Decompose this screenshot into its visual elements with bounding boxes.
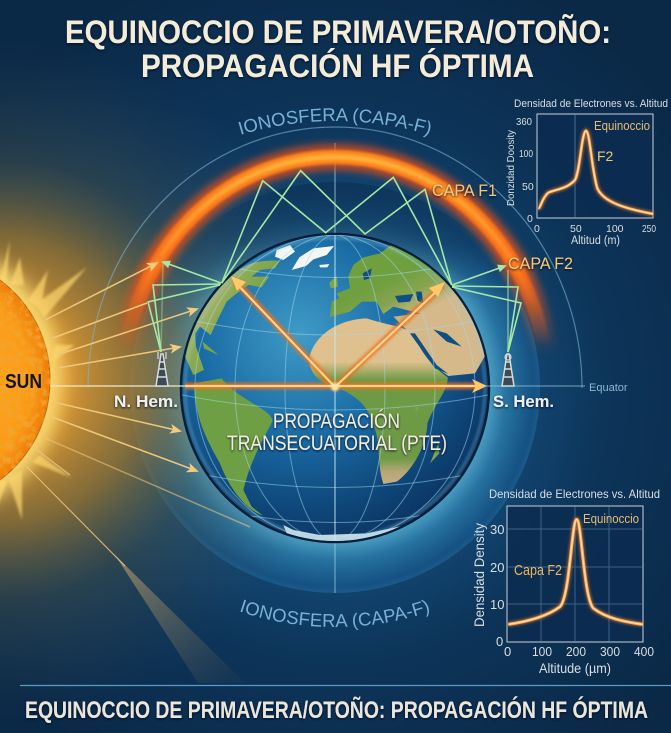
label: transequatorial propagation: PROPAGACIÓN	[273, 410, 400, 433]
continent: north america	[185, 261, 280, 375]
limb shading	[185, 238, 485, 538]
label: ionosfera top: IONOSFERA (CAPA-F)	[238, 108, 430, 138]
chart: top density: 0	[534, 223, 540, 235]
chart: bottom density	[471, 487, 660, 676]
sun rays glow	[0, 240, 87, 520]
sea: gulfs	[363, 268, 462, 374]
label: N. Hem.: N. Hem.	[114, 392, 178, 411]
equator line	[50, 235, 585, 540]
orange propagation arrows	[185, 276, 487, 393]
chart: top density: 250	[642, 223, 656, 235]
chart: bottom density: 0	[496, 634, 503, 649]
chart: top density: Equinoccio	[594, 119, 650, 133]
chart: bottom density: 30	[490, 522, 504, 537]
chart: bottom density: 200	[566, 644, 586, 659]
label: transequatorial propagation: TRANSECUATORIAL (PTE)	[227, 432, 447, 455]
ionospheric F layer arc	[123, 157, 547, 388]
title	[65, 14, 611, 84]
title: EQUINOCCIO DE PRIMAVERA/OTOÑO:	[65, 14, 611, 50]
label: S. Hem.: S. Hem.	[493, 392, 554, 411]
chart: top density: Altitud (m)	[571, 235, 620, 247]
continent: eurasia	[330, 243, 488, 376]
green skywave paths	[148, 171, 521, 352]
chart: bottom density: 0	[504, 644, 511, 659]
chart: bottom density: Equinoccio	[583, 512, 639, 526]
chart: bottom density: Densidad Density	[471, 523, 487, 627]
chart: top density	[505, 98, 668, 247]
continent: antarctica	[283, 525, 401, 541]
sun: SUN	[5, 371, 42, 393]
continent: africa	[309, 318, 448, 484]
chart: bottom density: 20	[490, 560, 504, 575]
continent: greenland	[275, 245, 334, 270]
icon: north tower	[156, 352, 168, 386]
chart: top density: F2	[597, 148, 614, 164]
label: CAPA F2: CAPA F2	[508, 254, 573, 273]
chart: bottom density: 100	[532, 644, 552, 659]
chart: top density: 50	[522, 181, 534, 193]
equator label: Equator	[589, 382, 628, 394]
label: transequatorial propagation	[227, 410, 447, 455]
title: PROPAGACIÓN HF ÓPTIMA	[141, 48, 534, 84]
chart: bottom density: 400	[634, 644, 654, 659]
ionosphere rings	[88, 127, 582, 593]
icon: south tower	[502, 354, 514, 386]
chart: bottom density: Densidad de Electrones vs. Altitud	[489, 487, 660, 501]
solar ray arrows	[37, 263, 250, 527]
sun	[0, 255, 50, 505]
label: ionosfera bottom: IONOSFERA (CAPA-F)	[240, 600, 429, 630]
continent: south america	[194, 378, 273, 515]
label: CAPA F1: CAPA F1	[432, 181, 497, 200]
chart: bottom density: Capa F2	[514, 562, 562, 579]
chart: top density: 100	[606, 223, 624, 235]
graticule	[182, 235, 488, 541]
chart: bottom density: Altitude (µm)	[539, 660, 611, 676]
chart: top density: 100	[519, 148, 533, 160]
chart: top density: 0	[527, 213, 533, 225]
chart: bottom density: 300	[600, 644, 620, 659]
chart: top density: 50	[570, 223, 582, 235]
globe	[181, 234, 489, 550]
chart: top density: 360	[516, 116, 532, 128]
islands	[203, 276, 439, 463]
chart: top density: Donzidad Doosity	[505, 129, 517, 206]
chart: bottom density: 10	[490, 597, 504, 612]
